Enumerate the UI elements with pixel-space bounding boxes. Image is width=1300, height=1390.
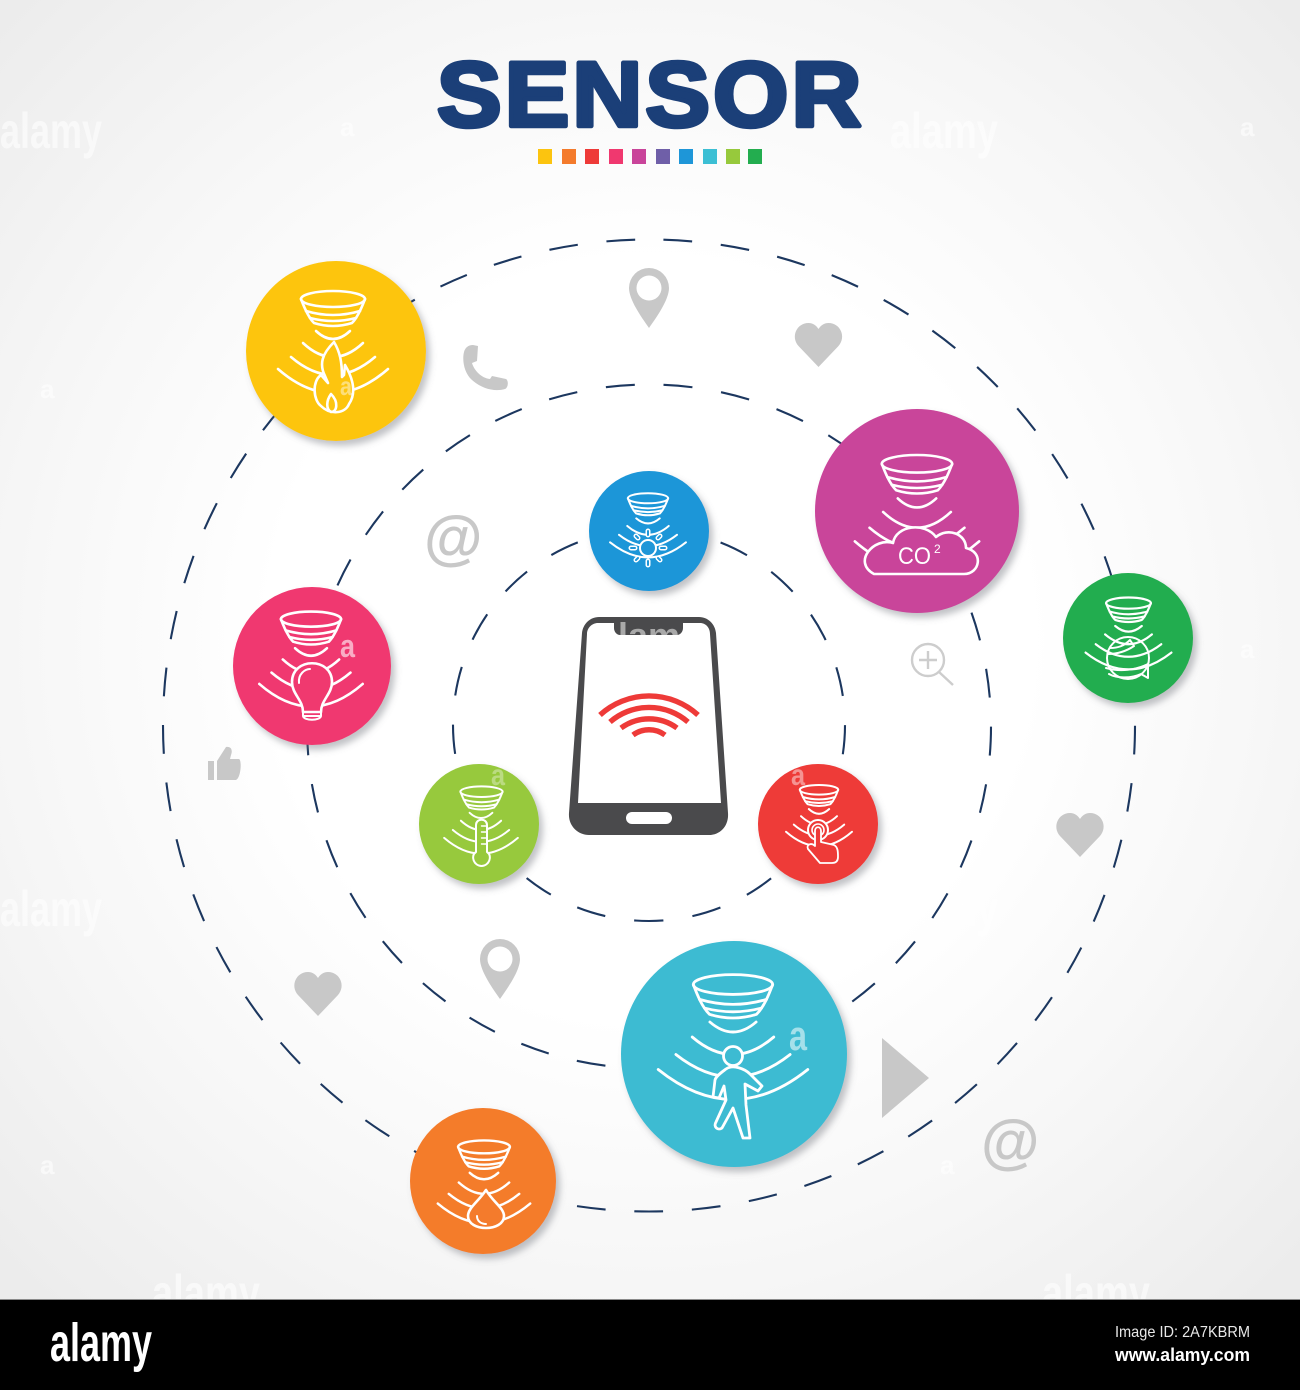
icon: location pin lower (480, 939, 520, 999)
panel: globe sensor (1063, 573, 1193, 703)
panel: fire sensor: a (340, 371, 352, 401)
icon: play triangle (882, 1038, 929, 1118)
icon: at sign lower: @ (981, 1108, 1040, 1175)
icon: location pin top (629, 268, 669, 328)
panel: motion sensor (621, 941, 847, 1167)
panel: thermometer sensor (419, 759, 539, 884)
title: SENSOR (437, 44, 865, 146)
icon: thumbs up (208, 747, 241, 780)
colour swatch row (538, 149, 762, 164)
panel: light sensor (589, 471, 709, 591)
panel: touch sensor: a (791, 759, 805, 792)
panel: CO2 sensor: 2 (934, 542, 941, 556)
panel: motion sensor: a (789, 1012, 807, 1059)
faint watermark: alamy (0, 881, 102, 937)
image id: Image ID: 2A7KBRM (1115, 1324, 1250, 1341)
icon: heart right (1056, 813, 1104, 857)
footer logo: alamy (50, 1313, 152, 1373)
panel: bulb sensor (233, 587, 391, 745)
panel: water sensor (410, 1108, 556, 1254)
icon: magnifier (912, 644, 953, 685)
faint watermark: alamy (0, 103, 102, 159)
faint watermark: a (1240, 112, 1255, 142)
faint watermark: a (340, 112, 355, 142)
faint watermark: alamy (1042, 1265, 1150, 1321)
panel: CO2 sensor: CO (898, 543, 931, 570)
faint watermark: alamy (890, 881, 998, 937)
icon: at sign upper: @ (424, 504, 483, 571)
footer bar (0, 1299, 1300, 1390)
faint watermark: alamy (152, 1265, 260, 1321)
faint watermark: a (940, 1150, 955, 1180)
icon: heart upper right (795, 323, 842, 367)
panel: touch sensor (758, 759, 878, 884)
panel: CO2 sensor (815, 409, 1019, 613)
panel: fire sensor (246, 261, 426, 441)
icon: heart lower left (294, 972, 342, 1016)
faint watermark: a (40, 1150, 55, 1180)
faint watermark: a (40, 374, 55, 404)
panel: thermometer sensor: a (491, 759, 505, 792)
panel: bulb sensor: a (340, 628, 355, 664)
icon: phone (463, 345, 508, 390)
phone: lam (618, 617, 680, 655)
faint watermark: a (1240, 634, 1255, 664)
faint watermark: a (940, 374, 955, 404)
dashed orbit rings (149, 225, 1149, 1226)
faint watermark: alamy (890, 103, 998, 159)
phone (569, 617, 728, 835)
website: www.alamy.com (1114, 1345, 1250, 1365)
